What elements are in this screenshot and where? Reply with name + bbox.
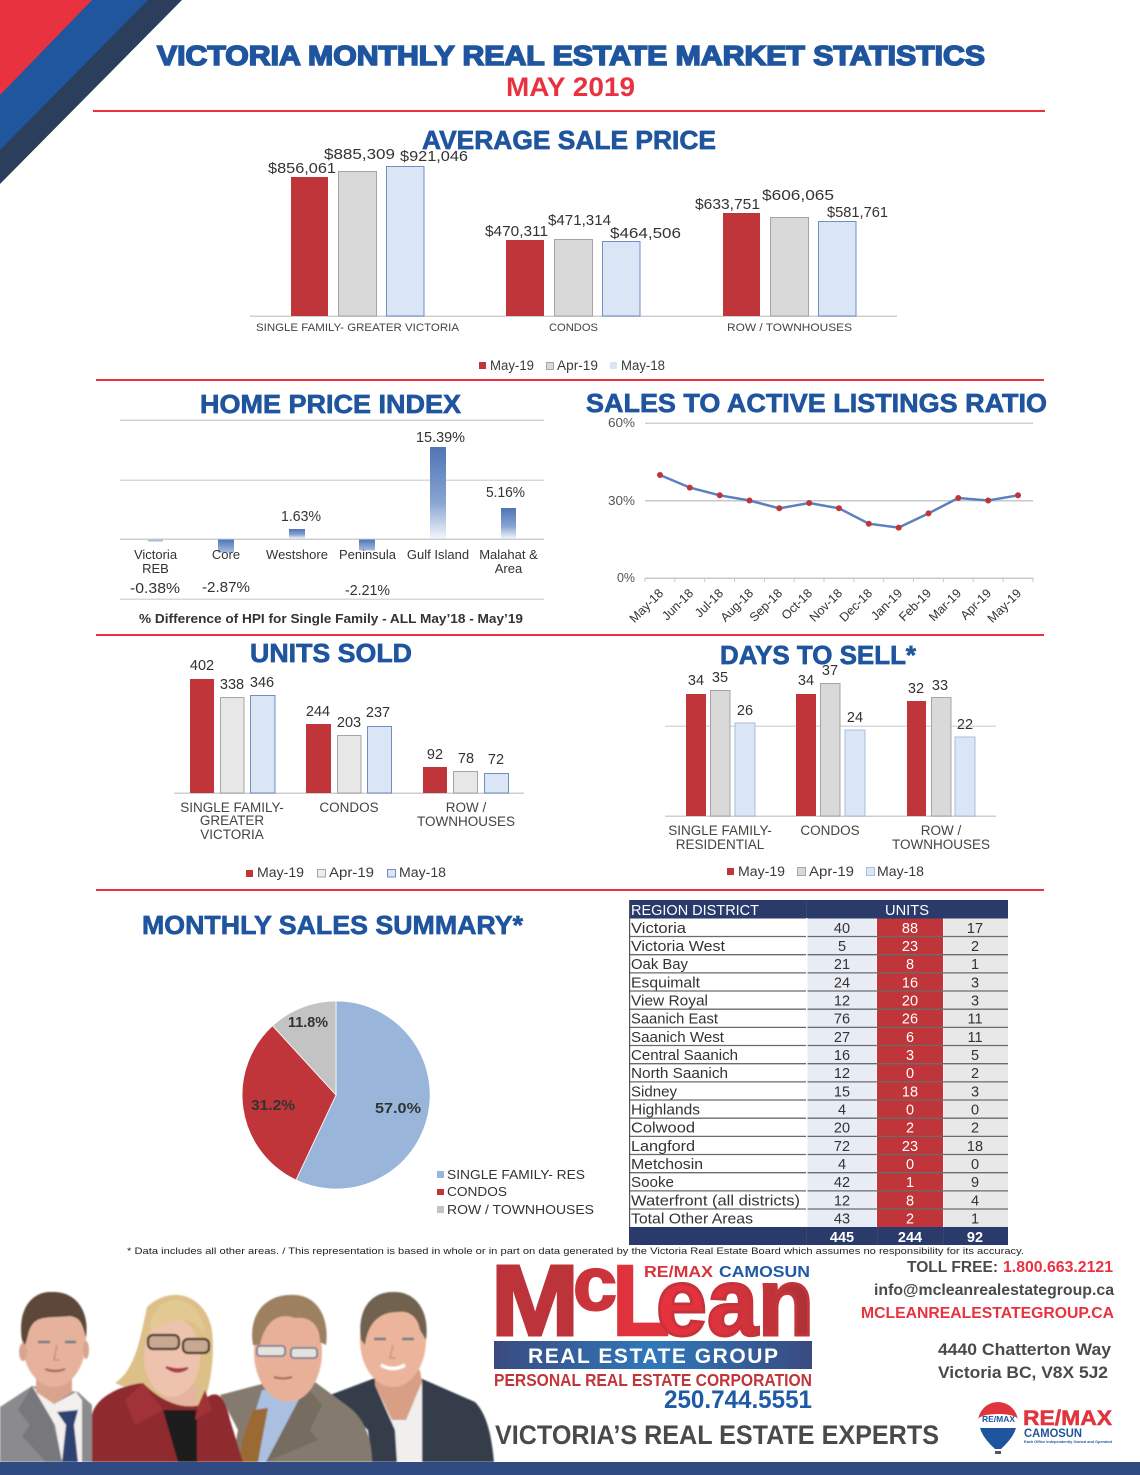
line chart: sales to active listings ratio: Apr-19 [958,586,994,623]
table: region district units: 17 [967,921,983,937]
bar chart: units sold: GREATER [200,813,264,828]
bar chart: days to sell: CONDOS [800,823,860,838]
logo wordmark: RE/MAX [644,1264,713,1281]
bar chart: units sold: 92 [427,747,443,763]
pie chart: monthly sales summary: 11.8% [288,1014,328,1031]
line chart: sales to active listings ratio: 0% [617,570,635,585]
legend: units sold: May-18 [399,865,446,880]
table: region district units: Sidney [631,1084,677,1100]
bar chart: units sold: CONDOS [319,800,379,815]
bar chart: days to sell: 33 [932,678,948,694]
legend: units sold: Apr-19 [329,865,374,880]
line chart: sales to active listings ratio: 30% [608,493,635,508]
table: region district units: Victoria [631,920,687,937]
table: region district units: 0 [906,1157,914,1173]
table: region district units: 4 [838,1102,846,1118]
table: region district units: Colwood [631,1120,695,1136]
table: region district units: 92 [967,1230,983,1246]
bar chart: home price index: Gulf Island [407,547,469,562]
phone number: 250.744.5551 [664,1386,812,1414]
table: region district units: North Saanich [631,1065,728,1082]
table: region district units: Total Other Areas [631,1210,753,1228]
legend: days to sell: May-19 [738,864,785,879]
table: region district units: 8 [906,1194,914,1210]
line chart: sales to active listings ratio: Feb-19 [896,586,934,624]
bar chart: units sold: 346 [250,675,274,691]
table: region district units: 16 [834,1048,850,1064]
line chart: sales to active listings ratio: May-19 [985,586,1024,626]
bar chart: home price index: 1.63% [281,508,321,525]
table: region district units: 27 [834,1030,850,1046]
bar chart: average sale price [250,146,897,334]
bar chart: units sold: 402 [190,658,214,674]
bar chart: home price index: Westshore [266,547,328,562]
main title: MAY 2019 [506,72,635,102]
table: region district units: UNITS [885,903,929,919]
logo subtitle: PERSONAL REAL ESTATE CORPORATION [494,1370,812,1390]
table: region district units: 76 [834,1012,850,1028]
legend: average sale price: May-19 [490,358,534,373]
bar chart: days to sell: SINGLE FAMILY- [668,823,772,838]
bar chart: days to sell: 24 [847,710,863,726]
table: region district units: Esquimalt [631,974,701,992]
table: region district units: 4 [838,1157,846,1173]
panel: days to sell [665,640,996,879]
table: region district units: Saanich East [631,1010,719,1028]
table: region district units: 3 [971,994,979,1010]
legend: monthly sales summary: SINGLE FAMILY- RES [447,1167,585,1182]
bar chart: average sale price: CONDOS [549,322,598,334]
logo wordmark: ean [656,1249,814,1356]
contact details: 4440 Chatterton Way [938,1340,1112,1359]
footnote: * Data includes all other areas. / This representation is based in whole or in part on data generated by the Victoria Real Estate Board which assumes no responsibility for its accuracy. [127,1246,1024,1257]
legend: days to sell: Apr-19 [809,864,854,879]
bar chart: units sold: 244 [306,704,330,720]
table: region district units: Saanich West [631,1029,725,1046]
table: region district units: Victoria West [631,938,726,955]
contact details: MCLEANREALESTATEGROUP.CA [861,1305,1114,1322]
bar chart: units sold [174,658,524,842]
bar chart: days to sell: 22 [957,717,973,733]
logo wordmark: L [612,1245,670,1357]
legend: days to sell [727,864,924,879]
table: region district units: 72 [834,1139,850,1155]
line chart: sales to active listings ratio: Nov-18 [807,586,845,625]
legend: monthly sales summary [437,1167,594,1217]
table: region district units: Highlands [631,1102,700,1118]
heading: monthly sales summary: MONTHLY SALES SUMMARY* [142,910,524,940]
bar chart: days to sell: 34 [688,673,704,689]
logo banner: real estate group [494,1341,812,1369]
bar chart: home price index: -0.38% [130,580,180,597]
panel: average sale price [250,125,897,373]
logo: McLean real estate group [491,1242,814,1414]
bar chart: units sold: 203 [337,715,361,731]
table: region district units: 42 [834,1175,850,1191]
table: region district units: 9 [971,1175,979,1191]
main title [157,40,985,102]
panel: sales to active listings ratio [586,388,1047,626]
table: region district units: 2 [971,1066,979,1082]
line chart: sales to active listings ratio: May-18 [627,586,666,626]
legend: average sale price: May-18 [621,358,665,373]
table: region district units: 12 [834,1066,850,1082]
legend: units sold: May-19 [257,865,304,880]
logo: RE/MAX Camosun: CAMOSUN [1024,1428,1082,1440]
table: region district units: 8 [906,957,914,973]
table: region district units: 6 [906,1030,914,1046]
bar chart: average sale price: $921,046 [400,148,468,165]
table: region district units: 1 [906,1175,914,1191]
table: region district units: 23 [902,1139,918,1155]
table: region district units: 23 [902,939,918,955]
bar chart: home price index: -2.87% [202,579,250,596]
bar chart: days to sell: ROW / [921,823,961,838]
person 2 [92,1295,243,1462]
heading: average sale price: AVERAGE SALE PRICE [422,125,716,155]
table: region district units: Oak Bay [631,956,688,973]
table: region district units: 2 [971,1120,979,1136]
table: region district units: 26 [902,1012,918,1028]
panel: monthly sales summary [142,910,594,1217]
bar chart: days to sell: 32 [908,681,924,697]
bar chart: days to sell [665,663,996,852]
footer band [0,1462,1140,1475]
legend: average sale price: Apr-19 [557,358,598,373]
heading: home price index: HOME PRICE INDEX [200,389,462,419]
bar chart: units sold: TOWNHOUSES [417,814,515,829]
bar chart: home price index: 5.16% [486,484,525,501]
icon: RE/MAX balloon: RE/MAX [982,1414,1015,1424]
bar chart: home price index: Victoria [134,547,178,562]
table: region district units: 1 [971,1212,979,1228]
table: region district units [629,900,1008,1246]
bar chart: average sale price: $885,309 [324,146,395,163]
legend: monthly sales summary: ROW / TOWNHOUSES [447,1202,594,1217]
contact details: info@mcleanrealestategroup.ca [874,1282,1114,1299]
table: region district units: 12 [834,1194,850,1210]
bar chart: average sale price: $470,311 [485,223,548,240]
bar chart: days to sell: 26 [737,703,753,719]
panel: home price index [120,389,544,626]
icon: RE/MAX balloon [978,1402,1018,1454]
table: region district units: Central Saanich [631,1047,738,1064]
bar chart: days to sell: RESIDENTIAL [676,837,765,852]
line chart: sales to active listings ratio: Jan-19 [868,586,905,623]
bar chart: days to sell: TOWNHOUSES [892,837,990,852]
corner decoration: diagonal stripes [0,0,182,184]
table: region district units: 15 [834,1084,850,1100]
line chart: sales to active listings ratio: Oct-18 [779,586,815,623]
legend: days to sell: May-18 [877,864,924,879]
table: region district units: 2 [971,939,979,955]
logo wordmark: M [491,1245,579,1357]
table: region district units: 0 [971,1157,979,1173]
table: region district units: 43 [834,1212,850,1228]
panel: units sold [174,638,524,880]
table: region district units: 16 [902,976,918,992]
bar chart: average sale price: $856,061 [268,160,336,177]
logo wordmark: CAMOSUN [719,1264,810,1281]
bar chart: units sold: 72 [488,752,504,768]
table: region district units: 244 [898,1230,922,1246]
table: region district units: 20 [902,994,918,1010]
bar chart: average sale price: $581,761 [827,204,888,221]
bar chart: home price index: Malahat & [479,547,538,562]
table: region district units: 0 [906,1066,914,1082]
pie chart: monthly sales summary: 57.0% [375,1100,421,1117]
bar chart: home price index: Area [495,561,523,576]
table: region district units: 2 [906,1212,914,1228]
bar chart: units sold: 237 [366,705,390,721]
legend: monthly sales summary: CONDOS [447,1184,507,1199]
table: region district units: 5 [838,939,846,955]
bar chart: average sale price: ROW / TOWNHOUSES [727,322,852,334]
pie chart: monthly sales summary [242,1001,430,1189]
heading: units sold: UNITS SOLD [250,638,412,668]
logo wordmark: c [573,1242,617,1327]
line chart: sales to active listings ratio: Mar-19 [926,586,964,624]
table: region district units: REGION DISTRICT [631,903,759,919]
table: region district units: 40 [834,921,850,937]
table: region district units: 3 [971,1084,979,1100]
table: region district units: 0 [906,1102,914,1118]
bar chart: average sale price: $633,751 [695,196,760,213]
photo: team of four agents [0,1292,494,1462]
table: region district units: Langford [631,1138,695,1155]
bar chart: days to sell: 34 [798,673,814,689]
bar chart: average sale price: SINGLE FAMILY- GREATER VICTORIA [256,322,460,334]
bar chart: average sale price: $464,506 [610,225,681,242]
tagline: VICTORIA’S REAL ESTATE EXPERTS [495,1420,939,1450]
line chart: sales to active listings ratio [608,415,1033,626]
bar chart: home price index: Core [212,547,240,562]
line chart: sales to active listings ratio: Jul-18 [692,586,726,620]
table: region district units: 445 [830,1230,854,1246]
bar chart: home price index: Peninsula [339,547,397,562]
table: region district units: 88 [902,921,918,937]
table: region district units: View Royal [631,992,708,1010]
bar chart: home price index: REB [142,561,169,576]
heading: days to sell: DAYS TO SELL* [720,640,917,670]
line chart: sales to active listings ratio: Aug-18 [718,586,756,625]
table: region district units: Metchosin [631,1156,703,1173]
table: region district units: 1 [971,957,979,973]
table: region district units: Sooke [631,1174,674,1191]
bar chart: average sale price: $606,065 [762,187,834,204]
table: region district units: 11 [967,1030,983,1046]
bar chart: home price index [120,420,544,600]
heading: sales to active listings ratio: SALES TO ACTIVE LISTINGS RATIO [586,388,1047,418]
contact details: TOLL FREE: [907,1259,998,1276]
logo: RE/MAX Camosun [1023,1407,1113,1444]
bar chart: units sold: 338 [220,677,244,693]
table: region district units: 18 [967,1139,983,1155]
table: region district units: 21 [834,957,850,973]
bar chart: home price index: -2.21% [345,582,390,599]
person 4 [330,1292,494,1462]
person 3 [220,1295,372,1462]
logo: RE/MAX Camosun: RE/MAX [1023,1407,1112,1430]
contact details: 1.800.663.2121 [1003,1259,1113,1276]
bar chart: average sale price: $471,314 [548,212,611,229]
logo wordmark [491,1242,814,1357]
line chart: sales to active listings ratio: 60% [608,415,635,430]
bar chart: units sold: VICTORIA [200,827,264,842]
bar chart: units sold: 78 [458,751,474,767]
table: region district units: 3 [971,976,979,992]
bar chart: days to sell: 37 [822,663,838,679]
table: region district units: 5 [971,1048,979,1064]
line chart: sales to active listings ratio: Dec-18 [837,586,875,625]
line chart: sales to active listings ratio: Sep-18 [747,586,785,625]
legend: units sold [246,865,446,880]
table: region district units: 24 [834,976,850,992]
legend: average sale price [479,358,665,373]
table: region district units: 3 [906,1048,914,1064]
contact details: Victoria BC, V8X 5J2 [938,1363,1108,1382]
table: region district units: 0 [971,1102,979,1118]
logo banner: real estate group: REAL ESTATE GROUP [528,1345,778,1368]
pie chart: monthly sales summary: 31.2% [251,1097,295,1114]
table: region district units: 11 [967,1012,983,1028]
person 1 [0,1292,92,1462]
contact details [861,1259,1114,1382]
logo: RE/MAX Camosun: Each Office Independently Owned and Operated [1024,1439,1113,1444]
bar chart: units sold: ROW / [446,800,486,815]
bar chart: home price index: 15.39% [416,429,465,446]
table: region district units: 12 [834,994,850,1010]
caption: home price index: % Difference of HPI for Single Family - ALL May’18 - May’19 [139,611,523,626]
bar chart: units sold: SINGLE FAMILY- [180,800,284,815]
table: region district units: 2 [906,1120,914,1136]
table: region district units: 4 [971,1194,979,1210]
bar chart: days to sell: 35 [712,670,728,686]
table: region district units: 18 [902,1084,918,1100]
table: region district units: Waterfront (all districts) [631,1192,800,1210]
main title: VICTORIA MONTHLY REAL ESTATE MARKET STATISTICS [157,40,985,71]
table: region district units: 20 [834,1120,850,1136]
line chart: sales to active listings ratio: Jun-18 [659,586,696,623]
